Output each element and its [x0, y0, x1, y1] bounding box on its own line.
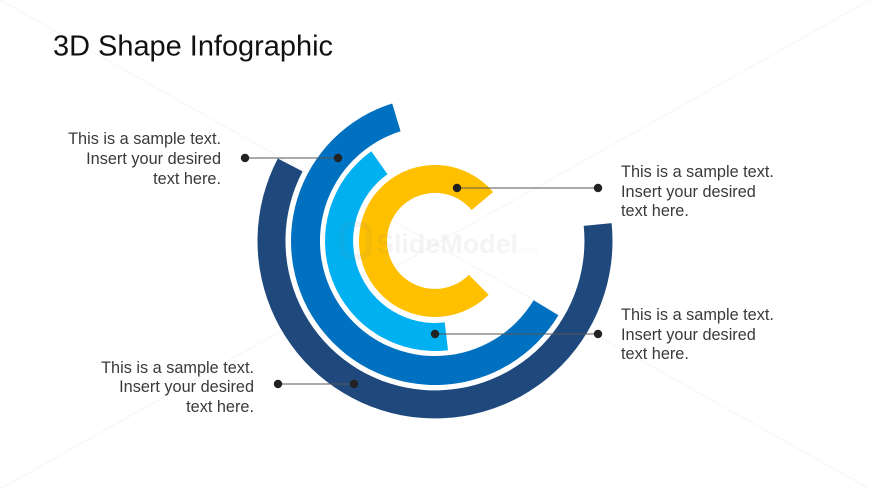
text block: bottom right: This is a sample text. — [621, 306, 774, 324]
text block: bottom right — [621, 306, 774, 363]
connector: top left — [241, 154, 342, 162]
text block: bottom left — [101, 359, 254, 416]
text block: bottom left: This is a sample text. — [101, 359, 254, 377]
text block: top left: This is a sample text. — [68, 130, 221, 148]
chart: concentric arcs — [257, 104, 612, 418]
title: 3D Shape Infographic — [53, 30, 333, 62]
arc: medium blue — [291, 104, 558, 385]
connector: light blue arc — [431, 330, 602, 338]
connector: yellow arc — [453, 184, 602, 192]
watermark: SlideModel — [376, 229, 518, 259]
text block: bottom left: Insert your desired — [119, 378, 254, 396]
text block: top left: text here. — [153, 170, 221, 188]
text block: top left — [68, 130, 221, 188]
text block: bottom left: text here. — [186, 398, 254, 416]
text block: top right: Insert your desired — [621, 183, 756, 201]
arc: yellow — [359, 165, 493, 317]
text block: top right: text here. — [621, 202, 689, 220]
arc: outer dark blue — [257, 158, 612, 418]
text block: bottom right: text here. — [621, 345, 689, 363]
text block: bottom right: Insert your desired — [621, 326, 756, 344]
text block: top left: Insert your desired — [86, 150, 221, 168]
text block: top right — [621, 163, 774, 220]
watermark: .com — [518, 245, 538, 256]
watermark — [342, 224, 538, 259]
text block: top right: This is a sample text. — [621, 163, 774, 181]
arc: light blue — [325, 151, 448, 351]
connector: bottom left — [274, 380, 358, 388]
